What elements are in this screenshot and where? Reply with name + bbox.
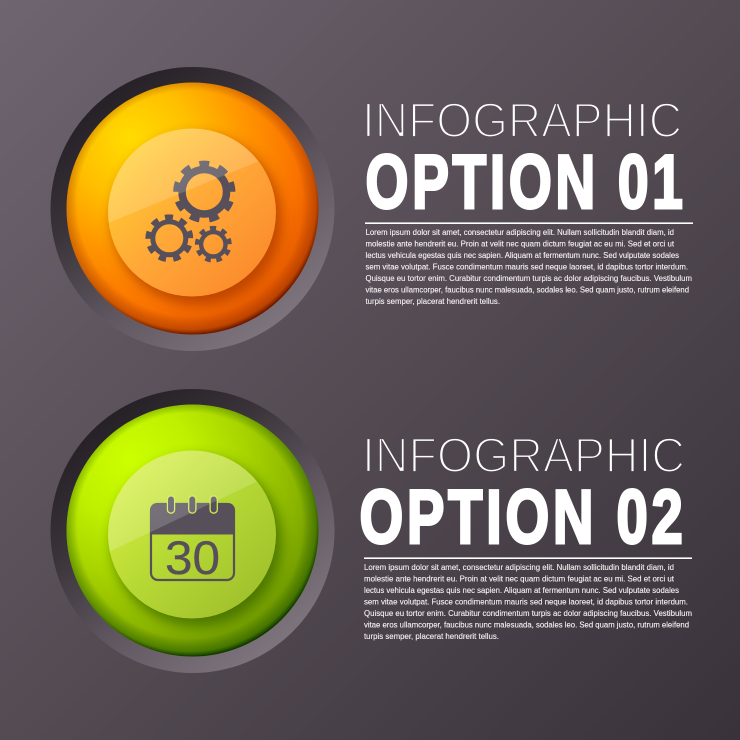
heading: infographic 01: INFOGRAPHIC [362, 94, 682, 148]
body text 02: molestie ante hendrerit eu. Proin at velit nec quam dictum feugiat ac eu mi. Sed et orci ut [364, 574, 675, 584]
panel: option 02 text [360, 429, 692, 641]
orange dome [66, 82, 318, 334]
icon: calendar [150, 496, 235, 584]
body text 02: turpis semper, placerat hendrerit tellus. [364, 631, 499, 641]
body text 01 [366, 227, 692, 306]
green dome [66, 404, 318, 656]
orange inner disc [108, 128, 276, 296]
green inner disc [108, 450, 276, 618]
body text 01: lectus vehicula egestas quis nec sapien. Aliquam at fermentum nunc. Sed vulputate sodales [366, 250, 680, 260]
body text 01: sem vitae volutpat. Fusce condimentum mauris sed neque laoreet, id dapibus tortor interdum. [366, 262, 688, 272]
disc gloss 01 [108, 128, 258, 223]
recessed ring 01 [50, 67, 334, 351]
calendar date: 30 [165, 531, 220, 584]
disc gloss 02 [108, 450, 257, 552]
disc shadow 01 [112, 135, 282, 305]
rule 02 [364, 557, 692, 559]
rule 01 [365, 222, 693, 224]
body text 02 [364, 562, 692, 641]
panel: option 01 button [50, 67, 334, 351]
body text 01: Lorem ipsum dolor sit amet, consectetur adipiscing elit. Nullam sollicitudin blandit diam, id [366, 227, 674, 237]
body text 02: lectus vehicula egestas quis nec sapien. Aliquam at fermentum nunc. Sed vulputate sodales [364, 585, 680, 595]
body text 01: vitae eros ullamcorper, faucibus nunc malesuada, sodales leo. Sed quam justo, rutrum eleifend [366, 284, 689, 294]
body text 02: Quisque eu tortor enim. Curabitur condimentum turpis ac dolor adipiscing faucibus. Vestibulum [364, 608, 692, 618]
body text 01: turpis semper, placerat hendrerit tellus. [366, 296, 500, 306]
body text 01: molestie ante hendrerit eu. Proin at velit nec quam dictum feugiat ac eu mi. Sed et orci ut [366, 238, 675, 248]
panel: option 02 button [50, 389, 334, 673]
recessed ring 02 [50, 389, 334, 673]
panel: option 01 text [362, 94, 693, 306]
body text 02: Lorem ipsum dolor sit amet, consectetur adipiscing elit. Nullam sollicitudin blandit diam, id [364, 562, 674, 572]
icon: gears [148, 164, 232, 260]
body text 01: Quisque eu tortor enim. Curabitur condimentum turpis ac dolor adipiscing faucibus. Vestibulum [366, 273, 692, 283]
body text 02: sem vitae volutpat. Fusce condimentum mauris sed neque laoreet, id dapibus tortor interdum. [364, 596, 688, 606]
body text 02: vitae eros ullamcorper, faucibus nunc malesuada, sodales leo. Sed quam justo, rutrum eleifend [364, 620, 689, 630]
disc shadow 02 [112, 457, 282, 627]
heading: infographic 02: INFOGRAPHIC [362, 429, 685, 483]
